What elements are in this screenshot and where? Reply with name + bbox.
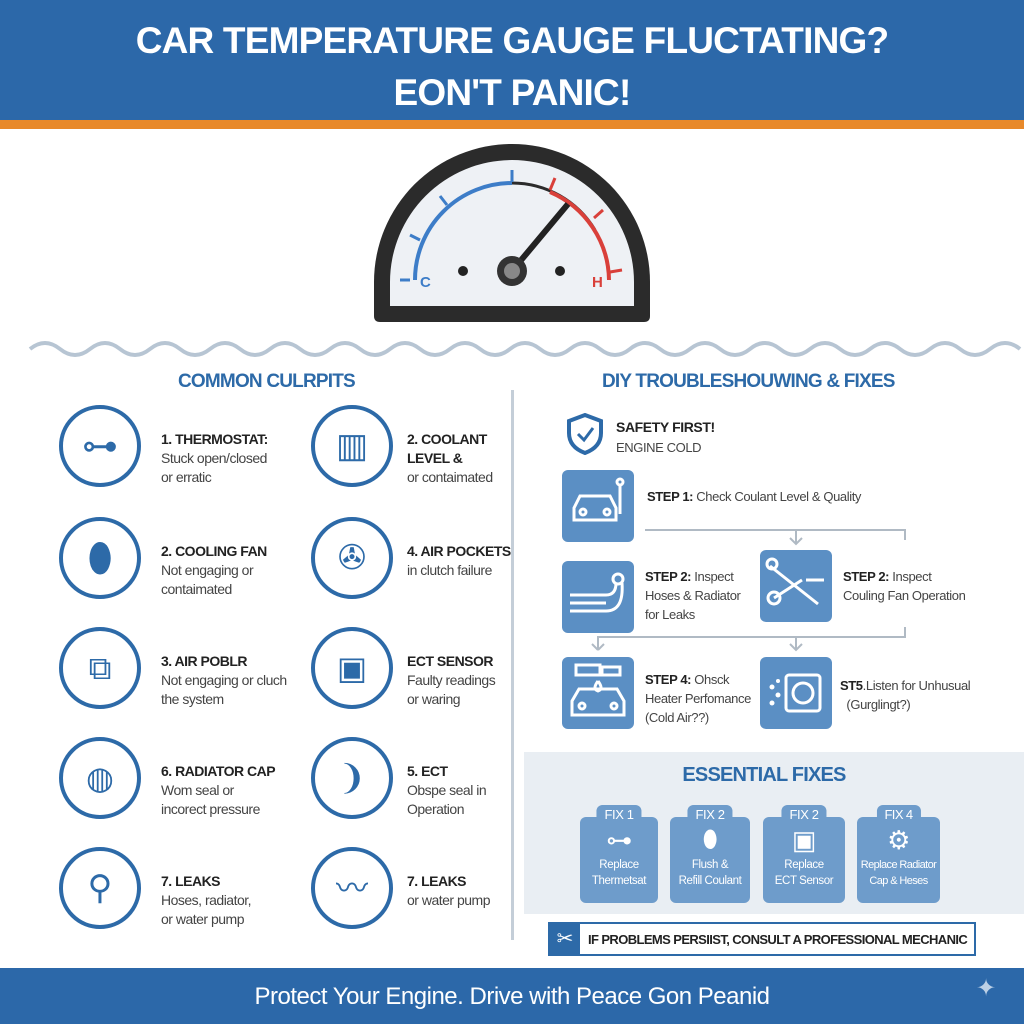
fix 3: Replace [784, 859, 824, 871]
footer: Protect Your Engine. Drive with Peace Gon Peanid [254, 983, 770, 1010]
wavy divider [28, 341, 1022, 357]
gauge [374, 144, 650, 322]
step 2a: Hoses & Radiator [645, 588, 740, 603]
culprit 10 [311, 847, 490, 929]
culprit 3: 2. COOLING FAN [161, 543, 267, 559]
header banner: CAR TEMPERATURE GAUGE FLUCTATING? [136, 20, 888, 61]
icon: shield [567, 413, 603, 455]
step 1 [562, 470, 862, 542]
culprit 10: 〰 [336, 870, 368, 906]
arrows/connectors [591, 529, 906, 652]
header banner: EON'T PANIC! [394, 72, 630, 113]
text: FIX 2 [695, 807, 725, 822]
step 5 [760, 657, 970, 729]
culprit 1: or erratic [161, 469, 211, 485]
culprit 3: contaimated [161, 581, 232, 597]
icon: sparkle: ✦ [976, 975, 996, 1002]
text: FIX 4 [884, 807, 913, 822]
culprit 8: Obspe seal in [407, 782, 486, 798]
orange stripe [0, 120, 1024, 129]
fix 2 [670, 817, 750, 903]
step 2b: Couling Fan Operation [843, 588, 965, 603]
culprit 4: in clutch failure [407, 562, 492, 578]
safety first: SAFETY FIRST! [616, 419, 715, 435]
panel: common culprits [59, 371, 511, 929]
culprit 1: ⊶ [82, 425, 118, 466]
culprit 2: ▥ [336, 427, 368, 465]
fix 1: Thermetsat [592, 875, 646, 887]
step 4: (Cold Air??) [645, 710, 709, 725]
heading: diy troubleshooting: DIY TROUBLESHOUWING & FIXES [602, 371, 895, 392]
culprit 8: Operation [407, 801, 464, 817]
culprit 7: 6. RADIATOR CAP [161, 763, 275, 779]
step 4 [562, 657, 751, 729]
culprit 9: or water pump [161, 911, 244, 927]
step 4: STEP 4: Ohsck [645, 672, 729, 687]
fix 3: ECT Sensor [775, 875, 833, 887]
culprit 7: incorect pressure [161, 801, 260, 817]
heading: essential fixes: ESSENTIAL FIXES [682, 764, 846, 786]
culprit 4 [311, 517, 511, 599]
safety first: ENGINE COLD [616, 440, 701, 455]
culprit 1 [59, 405, 268, 487]
culprit 5: 3. AIR POBLR [161, 653, 247, 669]
heading: common culprits: COMMON CULRPITS [178, 371, 355, 392]
text: FIX 2 [789, 807, 819, 822]
step 2a [562, 561, 741, 633]
step 1: STEP 1: Check Coulant Level & Quality [647, 489, 861, 504]
culprit 6: or waring [407, 691, 460, 707]
fix 3: ▣ [792, 825, 816, 855]
culprit 5 [59, 627, 287, 709]
culprit 10: 7. LEAKS [407, 873, 466, 889]
culprit 1: 1. THERMOSTAT: [161, 431, 268, 447]
fix 2: Flush & [692, 859, 728, 871]
step 5: ST5.Listen for Unhusual [840, 678, 970, 693]
culprit 6: ECT SENSOR [407, 653, 493, 669]
culprit 2 [311, 405, 493, 487]
fix 4: Replace Radiator [861, 859, 936, 871]
culprit 4: ✇ [338, 539, 366, 577]
culprit 3: ⬮ [87, 536, 113, 580]
fix 2: Refill Coulant [679, 875, 741, 887]
vertical divider [511, 390, 514, 940]
culprit 9: ⚲ [88, 869, 112, 907]
text: FIX 1 [604, 807, 634, 822]
step 5: (Gurglingt?) [846, 697, 910, 712]
culprit 9: Hoses, radiator, [161, 892, 251, 908]
step 2a: for Leaks [645, 607, 695, 622]
culprit 9: 7. LEAKS [161, 873, 220, 889]
callout: consult mechanic: IF PROBLEMS PERSIIST, CONSULT A PROFESSIONAL MECHANIC [588, 932, 967, 947]
step 4: Heater Perfomance [645, 691, 751, 706]
fix 1: Replace [599, 859, 639, 871]
callout: consult mechanic [548, 922, 976, 956]
fix 1: ⊶ [606, 825, 632, 855]
culprit 6: ▣ [337, 650, 367, 686]
culprit 2: 2. COOLANT [407, 431, 487, 447]
fix 4: Cap & Heses [869, 875, 928, 887]
culprit 2: LEVEL & [407, 450, 462, 466]
culprit 5: ⧉ [89, 650, 111, 686]
fix 3 [763, 817, 845, 903]
culprit 7: ◍ [86, 760, 114, 796]
culprit 2: or contaimated [407, 469, 493, 485]
fix 4: ⚙ [887, 825, 910, 855]
fix 4 [857, 817, 940, 903]
gauge: H [592, 274, 603, 291]
icon: tools [550, 924, 580, 954]
step 2b: STEP 2: Inspect [843, 569, 931, 584]
culprit 6 [311, 627, 496, 709]
culprit 1: Stuck open/closed [161, 450, 267, 466]
culprit 5: Not engaging or cluch [161, 672, 287, 688]
header banner [0, 0, 1024, 120]
icon: tools: ✂ [557, 928, 573, 950]
culprit 3 [59, 517, 267, 599]
culprit 3: Not engaging or [161, 562, 253, 578]
culprit 10: or water pump [407, 892, 490, 908]
fix 1 [580, 817, 658, 903]
fix 2: ⬮ [703, 826, 717, 853]
culprit 8 [311, 737, 486, 819]
safety first [567, 413, 715, 455]
culprit 6: Faulty readings [407, 672, 495, 688]
culprit 9 [59, 847, 251, 929]
culprit 4: 4. AIR POCKETS [407, 543, 511, 559]
culprit 5: the system [161, 691, 224, 707]
gauge: C [420, 274, 431, 291]
step 2b [760, 550, 965, 622]
culprit 7: Wom seal or [161, 782, 234, 798]
culprit 8: 5. ECT [407, 763, 448, 779]
panel: essential fixes [524, 752, 1024, 914]
culprit 8: ❩ [338, 759, 366, 797]
culprit 7 [59, 737, 276, 819]
step 2a: STEP 2: Inspect [645, 569, 733, 584]
footer [0, 968, 1024, 1024]
